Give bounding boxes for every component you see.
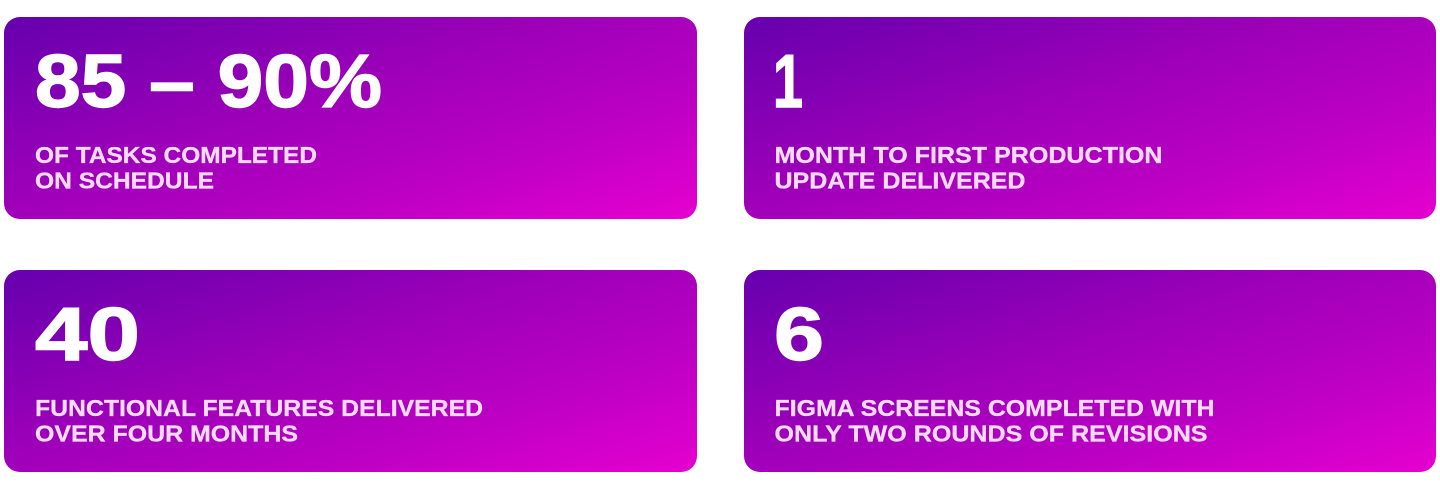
big number: 40: 40 bbox=[35, 292, 140, 376]
big number: 1: 1 bbox=[772, 39, 802, 123]
panel: first production update bbox=[744, 17, 1436, 219]
description: month to first production update delivered: UPDATE DELIVERED bbox=[774, 168, 1025, 194]
description: functional features delivered over four months: OVER FOUR MONTHS bbox=[35, 420, 298, 446]
description: figma screens completed with only two rounds of revisions: FIGMA SCREENS COMPLETED WITH bbox=[774, 395, 1214, 421]
description: functional features delivered over four months: FUNCTIONAL FEATURES DELIVERED bbox=[35, 395, 483, 421]
description: of tasks completed on schedule: ON SCHEDULE bbox=[35, 168, 214, 194]
panel: functional features bbox=[4, 270, 696, 472]
description: month to first production update delivered: MONTH TO FIRST PRODUCTION bbox=[774, 142, 1162, 168]
panel: figma screens bbox=[744, 270, 1436, 472]
description: functional features delivered over four months bbox=[35, 395, 483, 446]
description: figma screens completed with only two rounds of revisions bbox=[774, 395, 1214, 446]
big number: 6: 6 bbox=[774, 292, 824, 376]
panel: tasks on schedule bbox=[4, 17, 696, 219]
big number: 85 – 90%: 85 – 90% bbox=[35, 39, 382, 123]
description: figma screens completed with only two rounds of revisions: ONLY TWO ROUNDS OF REVISIONS bbox=[774, 420, 1207, 446]
description: month to first production update delivered bbox=[774, 142, 1162, 194]
description: of tasks completed on schedule bbox=[35, 142, 317, 194]
description: of tasks completed on schedule: OF TASKS COMPLETED bbox=[35, 142, 317, 168]
